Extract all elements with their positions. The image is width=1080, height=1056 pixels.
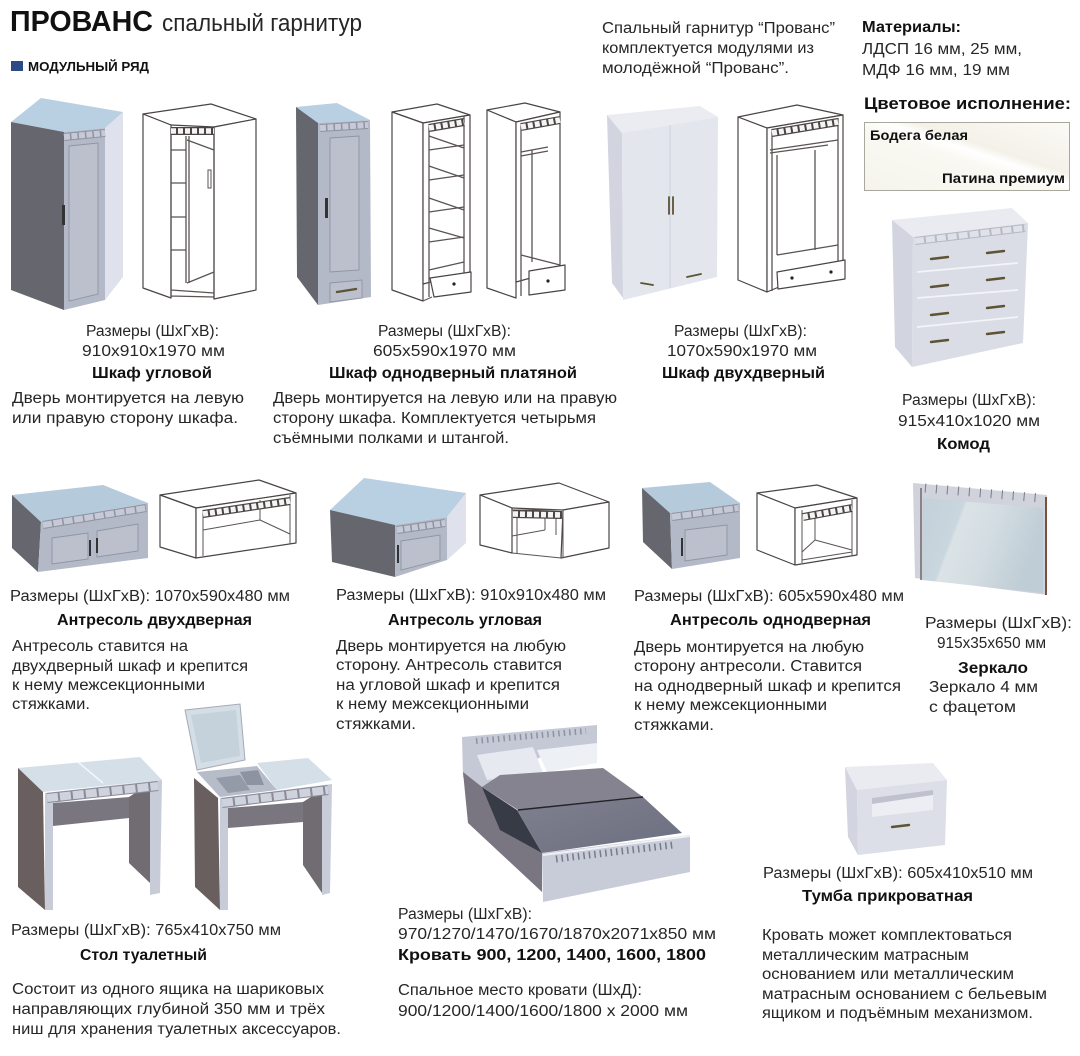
panel: bedside table — [762, 763, 1047, 1022]
colour swatch: Бодега белая — [870, 127, 968, 143]
corner wardrobe line drawing — [143, 104, 256, 299]
two-door mezzanine text: Антресоль ставится на — [12, 638, 188, 655]
two-door mezzanine render — [12, 485, 148, 572]
panel: single-door mezzanine — [634, 482, 904, 734]
corner mezzanine text: на угловой шкаф и крепится — [336, 677, 560, 694]
materials — [862, 19, 1022, 79]
two-door mezzanine text — [10, 588, 290, 713]
title: спальный гарнитур — [162, 10, 362, 37]
bed base note: основанием или металлическим — [762, 966, 1014, 983]
single-door mezzanine text: Размеры (ШхГхВ): 605x590x480 мм — [634, 588, 904, 605]
corner wardrobe text: Дверь монтируется на левую — [12, 390, 244, 407]
panel: dressing table — [11, 704, 341, 1038]
single-door mezzanine text — [634, 588, 904, 734]
bed base note: Кровать может комплектоваться — [762, 927, 1012, 944]
panel: chest of drawers — [892, 208, 1040, 453]
corner wardrobe text: Шкаф угловой — [92, 365, 212, 382]
two-door wardrobe text: 1070x590x1970 мм — [667, 343, 817, 360]
single-door mezzanine text: Дверь монтируется на любую — [634, 639, 864, 656]
corner mezzanine text: Антресоль угловая — [388, 612, 542, 629]
section label: modular range: МОДУЛЬНЫЙ РЯД — [28, 59, 150, 74]
title — [10, 6, 362, 38]
bedside table text: Размеры (ШхГхВ): 605x410x510 мм — [763, 865, 1033, 882]
corner mezzanine line drawing — [480, 483, 609, 558]
panel: corner wardrobe — [11, 98, 256, 427]
dressing table text: Состоит из одного ящика на шариковых — [12, 981, 324, 998]
corner wardrobe text: или правую сторону шкафа. — [12, 410, 238, 427]
single-door wardrobe text — [273, 323, 617, 447]
mirror render — [913, 483, 1047, 595]
intro text: Спальный гарнитур “Прованс” — [602, 20, 835, 37]
corner mezzanine render — [330, 478, 466, 577]
bed base note: матрасным основанием с бельевым — [762, 986, 1047, 1003]
single-door mezzanine text: стяжками. — [634, 717, 714, 734]
materials: МДФ 16 мм, 19 мм — [862, 62, 1010, 79]
chest render — [892, 208, 1028, 367]
mirror text: Зеркало — [958, 660, 1028, 677]
two-door mezzanine line drawing — [160, 480, 296, 558]
corner wardrobe text — [12, 323, 244, 427]
dressing table text: Стол туалетный — [80, 947, 207, 964]
chest text: Комод — [937, 436, 990, 453]
bed text: Спальное место кровати (ШхД): — [398, 982, 642, 999]
dressing table text: ниш для хранения туалетных аксессуаров. — [12, 1021, 341, 1038]
bed text: Размеры (ШхГхВ): — [398, 906, 532, 923]
single-door wardrobe text: Размеры (ШхГхВ): — [378, 323, 511, 340]
single-door wardrobe text: съёмными полками и штангой. — [273, 430, 509, 447]
intro text: комплектуется модулями из — [602, 40, 814, 57]
intro text: молодёжной “Прованс”. — [602, 60, 789, 77]
bedside table text — [763, 865, 1033, 905]
corner mezzanine text: сторону. Антресоль ставится — [336, 657, 562, 674]
bed text — [398, 906, 716, 1020]
corner mezzanine text: Размеры (ШхГхВ): 910x910x480 мм — [336, 587, 606, 604]
two-door wardrobe render — [607, 106, 718, 300]
bed render — [462, 725, 690, 902]
two-door wardrobe text — [662, 323, 825, 382]
open dressing table render — [185, 704, 332, 910]
panel: corner mezzanine — [330, 478, 609, 733]
corner wardrobe text: 910x910x1970 мм — [82, 343, 225, 360]
chest text: Размеры (ШхГхВ): — [902, 392, 1036, 409]
closed dressing table render — [18, 757, 162, 910]
single-door wardrobe line drawing — [392, 104, 471, 301]
dressing table text: направляющих глубиной 350 мм и трёх — [12, 1001, 325, 1018]
panel: two-door wardrobe — [607, 105, 845, 382]
mirror text — [925, 615, 1072, 716]
two-door mezzanine text: Антресоль двухдверная — [57, 612, 252, 629]
two-door mezzanine text: двухдверный шкаф и крепится — [12, 658, 248, 675]
single-door wardrobe text: сторону шкафа. Комплектуется четырьмя — [273, 410, 596, 427]
corner wardrobe text: Размеры (ШхГхВ): — [86, 323, 219, 340]
single-door wardrobe render — [296, 103, 371, 305]
two-door mezzanine text: стяжками. — [12, 696, 90, 713]
two-door mezzanine text: Размеры (ШхГхВ): 1070x590x480 мм — [10, 588, 290, 605]
corner wardrobe render — [11, 98, 123, 310]
mirror text: Размеры (ШхГхВ): — [925, 615, 1072, 632]
panel: two-door mezzanine — [10, 480, 296, 713]
colour heading: Цветовое исполнение: — [864, 94, 1071, 113]
corner mezzanine text: к нему межсекционными — [336, 696, 529, 713]
colour swatch — [864, 122, 1070, 190]
materials: Материалы: — [862, 19, 961, 36]
intro text — [602, 20, 835, 77]
bed text: 900/1200/1400/1600/1800 x 2000 мм — [398, 1003, 688, 1020]
corner mezzanine text: Дверь монтируется на любую — [336, 638, 566, 655]
corner mezzanine text: стяжками. — [336, 716, 416, 733]
single-door wardrobe text: Шкаф однодверный платяной — [329, 365, 577, 382]
single-door mezzanine line drawing — [757, 485, 857, 565]
corner mezzanine text — [336, 587, 606, 733]
single-door mezzanine render — [642, 482, 740, 569]
bed base note: ящиком и подъёмным механизмом. — [762, 1005, 1033, 1022]
mirror text: Зеркало 4 мм — [929, 679, 1038, 696]
panel: bed — [398, 725, 716, 1020]
bedside table render — [845, 763, 947, 855]
panel: single-door wardrobe — [273, 103, 617, 447]
dressing table text: Размеры (ШхГхВ): 765x410x750 мм — [11, 922, 281, 939]
title: ПРОВАНС — [10, 6, 153, 38]
single-door mezzanine text: Антресоль однодверная — [670, 612, 871, 629]
bed text: Кровать 900, 1200, 1400, 1600, 1800 — [398, 947, 706, 964]
bed base note — [762, 927, 1047, 1022]
bed text: 970/1270/1470/1670/1870x2071x850 мм — [398, 926, 716, 943]
bed base note: металлическим матрасным — [762, 947, 969, 964]
single-door wardrobe text: Дверь монтируется на левую или на правую — [273, 390, 617, 407]
chest text — [898, 392, 1040, 453]
two-door wardrobe text: Шкаф двухдверный — [662, 365, 825, 382]
two-door wardrobe text: Размеры (ШхГхВ): — [674, 323, 807, 340]
single-door wardrobe text: 605x590x1970 мм — [373, 343, 516, 360]
single-door mezzanine text: на однодверный шкаф и крепится — [634, 678, 901, 695]
two-part line drawing — [487, 103, 565, 298]
two-door wardrobe line drawing — [738, 105, 845, 292]
mirror text: 915x35x650 мм — [937, 635, 1046, 652]
bedside table text: Тумба прикроватная — [802, 888, 973, 905]
two-door mezzanine text: к нему межсекционными — [12, 677, 205, 694]
dressing table text — [11, 922, 341, 1038]
chest text: 915x410x1020 мм — [898, 413, 1040, 430]
materials: ЛДСП 16 мм, 25 мм, — [862, 41, 1022, 58]
single-door mezzanine text: сторону антресоли. Ставится — [634, 658, 862, 675]
mirror text: с фацетом — [929, 699, 1016, 716]
panel: mirror — [913, 483, 1072, 716]
single-door mezzanine text: к нему межсекционными — [634, 697, 827, 714]
colour swatch: Патина премиум — [942, 170, 1065, 186]
